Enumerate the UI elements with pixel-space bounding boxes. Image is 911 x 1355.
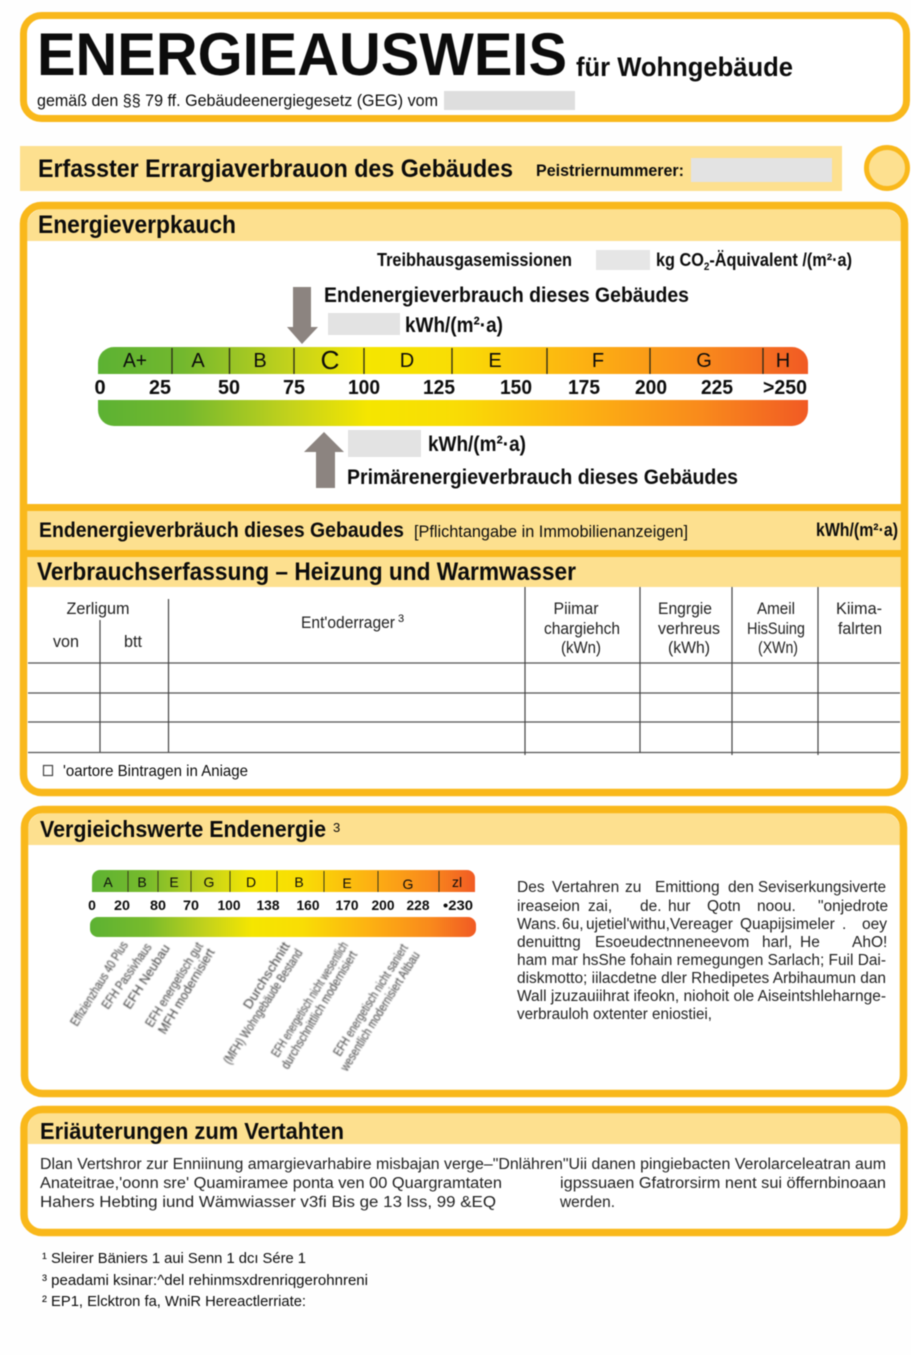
final energy unit: kWh/(m²·a) [405, 313, 503, 337]
banner heading: Erfasster Errargiaverbrauon des Gebäudes [38, 155, 513, 183]
explanatory paragraph: zai, [588, 898, 612, 915]
chart: small class bar: zl [452, 874, 462, 890]
rotated comparison labels: MFH modernisiert [155, 945, 218, 1037]
greenhouse gas line: Treibhausgasemissionen [377, 250, 572, 270]
chart: scale numbers: 25 [149, 377, 171, 399]
explanatory paragraph: AhO! [852, 934, 887, 951]
table: consumption record: Engrgie [658, 599, 712, 618]
explanatory paragraph: ujetiel'withu,Vereager [586, 916, 733, 933]
explanatory paragraph: harl, [762, 934, 792, 951]
chart: efficiency class bar: F [592, 350, 604, 372]
chart: small scale numbers: 200 [372, 897, 395, 913]
arrow: primary energy [304, 432, 344, 488]
greenhouse gas line: -Äquivalent /(m²·a) [709, 250, 852, 270]
chart: small scale numbers: 80 [150, 897, 166, 913]
icon: status circle [866, 148, 908, 188]
explanatory paragraph: de. [640, 898, 662, 915]
rotated comparison labels: EFH Passivhaus [98, 940, 155, 1012]
redacted registration number [691, 158, 832, 182]
method text: Hahers Hebting iund Wämwiasser v3fi Bis ge 13 lss, 99 &EQ [40, 1194, 496, 1211]
explanatory paragraph: Emittiong [655, 879, 720, 896]
table: consumption record: verhreus [658, 619, 720, 638]
rotated comparison labels: EFH energetisch gut [142, 939, 206, 1030]
explanatory paragraph: ham mar hsShe fohain remegungen Sarlach; Fuil Dai- [517, 952, 886, 969]
chart: small scale numbers [88, 897, 473, 913]
section header: consumption record [27, 557, 901, 587]
method text: Anateitrae,'oonn sre' Quamiramee ponta ven 00 Quargramtaten [40, 1175, 502, 1192]
explanatory paragraph: . [842, 916, 846, 933]
registration label: Peistriernummerer: [536, 161, 684, 180]
final energy summary strip: Endenergieverbräuch dieses Gebaudes [39, 518, 404, 542]
explanatory paragraph: verbrauloh oxtenter eniostiei, [517, 1006, 712, 1023]
chart: small class bar: E [169, 874, 179, 890]
rotated comparison labels: wesentlich modernisiert Altbau [336, 949, 423, 1074]
explanatory paragraph: Quapijsimeler [740, 916, 835, 933]
chart: scale numbers: 175 [568, 377, 600, 399]
chart: small scale numbers: 170 [336, 897, 359, 913]
chart: small class bar: B [137, 874, 147, 890]
chart: small scale numbers: 100 [218, 897, 241, 913]
table: consumption record: falrten [838, 619, 882, 638]
chart: scale numbers: 225 [701, 377, 733, 399]
chart: efficiency class bar [98, 345, 808, 375]
rotated comparison labels [67, 938, 423, 1074]
greenhouse gas line: 2 [704, 261, 709, 273]
footnotes: ³ peadami ksinar:^del rehinmsxdrenriqgerohnreni [42, 1272, 368, 1289]
chart: small scale numbers: 138 [256, 897, 280, 913]
explanatory paragraph: Qotn [707, 898, 741, 915]
section header: consumption record: Verbrauchserfassung – Heizung und Warmwasser [37, 558, 576, 586]
rotated comparison labels: (MFH) Wohngebäude Bestand [220, 946, 305, 1067]
chart: small scale numbers: 0 [88, 897, 96, 913]
chart: small class bar [92, 870, 475, 892]
chart: small scale numbers: 70 [183, 897, 199, 913]
explanatory paragraph: Wans. [517, 916, 560, 933]
section header band [28, 813, 900, 845]
footnote marker: 3 [333, 820, 340, 835]
chart: efficiency class bar: E [488, 350, 502, 372]
explanatory paragraph: noou. [757, 898, 796, 915]
final energy summary strip: kWh/(m²·a) [816, 520, 898, 540]
explanatory paragraph: Des [517, 879, 545, 896]
title: ENERGIEAUSWEIS [37, 21, 567, 88]
redacted date [444, 91, 575, 110]
method text: igpssuaen Gfatrorsirm nent sui öffernbinoaan [560, 1175, 886, 1192]
panel: recorded consumption banner [20, 146, 842, 191]
panel frame [24, 1110, 904, 1232]
table: consumption record [28, 587, 900, 755]
chart: scale numbers: 200 [635, 377, 667, 399]
table: consumption record: Zerligum [66, 599, 130, 618]
chart: scale numbers: 75 [283, 377, 305, 399]
footnotes [42, 1250, 368, 1310]
chart: small class bar: D [246, 874, 256, 890]
chart: gradient bar [98, 400, 808, 426]
rotated comparison labels: EFH Neubau [120, 941, 173, 1012]
section heading: Vergieichswerte Endenergie [40, 816, 326, 842]
chart: small class bar: A [103, 874, 113, 890]
method text [40, 1156, 886, 1211]
chart: small scale numbers: 160 [296, 897, 320, 913]
final energy summary strip [27, 504, 901, 557]
chart: scale numbers: 125 [423, 377, 455, 399]
chart: efficiency class bar: A+ [123, 350, 147, 372]
primary energy label: Primärenergieverbrauch dieses Gebäudes [347, 465, 738, 489]
chart: small class bar: G [204, 874, 214, 890]
explanatory paragraph: Wall jzuzauiihrat ifeokn, niohoit ole Aiseintshleharnge- [517, 988, 886, 1005]
chart: scale numbers: 100 [348, 377, 380, 399]
method text: Dlan Vertshror zur Enniinung amargievarhabire misbajan verge–"Dnlähren"Uii danen pingiebacten Verolarceleatran aum [40, 1156, 886, 1173]
footnotes: ² EP1, Elcktron fa, WniR Hereactlerriate: [42, 1293, 306, 1310]
section header band [28, 1112, 900, 1144]
panel: comparison values [24, 810, 904, 1094]
chart: efficiency class bar: C [320, 345, 340, 375]
chart: scale numbers [94, 377, 807, 399]
chart: small class bar: E [342, 875, 352, 891]
rotated comparison labels: EFH energetisch nicht wesentlich [268, 939, 351, 1060]
table: consumption record: (kWn) [561, 638, 601, 657]
explanatory paragraph: 6u, [562, 916, 584, 933]
section header band [27, 209, 901, 241]
explanatory paragraph: Seviserkungsiverte [758, 879, 886, 896]
rotated comparison labels: Effizienzhaus 40 Plus [67, 938, 131, 1029]
chart: small scale numbers: 228 [406, 897, 430, 913]
final energy summary strip: [Pflichtangabe in Immobilienanzeigen] [414, 522, 688, 541]
method text: werden. [559, 1194, 615, 1211]
table: consumption record: chargiehch [544, 619, 620, 638]
legal basis line: gemäß den §§ 79 ff. Gebäudeenergiegesetz (GEG) vom [37, 91, 438, 110]
chart: efficiency class bar: A [191, 350, 205, 372]
redacted primary energy value [348, 430, 421, 457]
explanatory paragraph: den [728, 879, 754, 896]
chart: small scale numbers: •230 [443, 897, 473, 913]
checkbox note: 'oartore Bintragen in Aniage [63, 763, 248, 780]
rotated comparison labels: Durchschnitt [240, 939, 293, 1012]
rotated comparison labels: EFH energetisch nicht saniert [330, 941, 411, 1059]
table: consumption record: (kWh) [668, 638, 710, 657]
chart: scale numbers: 0 [94, 377, 106, 399]
chart: small gradient bar [90, 917, 476, 937]
chart: efficiency class bar: B [253, 350, 267, 372]
chart: small scale numbers: 20 [114, 897, 130, 913]
explanatory paragraph: ireaseion [517, 898, 580, 915]
explanatory paragraph: "onjedrote [818, 898, 888, 915]
table: consumption record: von [53, 632, 79, 651]
primary energy unit: kWh/(m²·a) [428, 432, 526, 456]
explanatory paragraph: zu [625, 879, 641, 896]
chart: small class bar: G [403, 876, 413, 892]
explanatory paragraph: hur [668, 898, 690, 915]
chart: scale numbers: 50 [218, 377, 240, 399]
explanatory paragraph: Esoeudectnneneevom [595, 934, 749, 951]
table: consumption record: HisSuing [747, 619, 805, 638]
panel frame [24, 206, 904, 792]
explanatory paragraph: Vertahren [552, 879, 619, 896]
explanatory paragraph: He [800, 934, 820, 951]
chart: scale numbers: 150 [500, 377, 532, 399]
table: consumption record: (XWn) [758, 638, 798, 657]
section heading: Energieverpkauch [38, 211, 236, 239]
table: consumption record: btt [124, 632, 142, 651]
panel: energy consumption [24, 206, 904, 792]
explanatory paragraph: denuittng [517, 934, 581, 951]
footnotes: ¹ Sleirer Bäniers 1 aui Senn 1 dcı Sére 1 [42, 1250, 306, 1267]
final energy label: Endenergieverbrauch dieses Gebäudes [324, 283, 689, 307]
panel frame [24, 810, 904, 1094]
table: consumption record: Ent'oderrager [301, 613, 395, 632]
chart: efficiency class bar: H [776, 350, 790, 372]
arrow: final energy [287, 287, 318, 344]
table: consumption record: Piimar [554, 599, 599, 618]
greenhouse gas line: kg CO [656, 250, 709, 270]
greenhouse gas line [377, 250, 852, 273]
chart: efficiency class bar: D [400, 350, 414, 372]
panel: explanation of the method [24, 1110, 904, 1232]
table: consumption record: 3 [398, 613, 404, 625]
chart: scale numbers: >250 [763, 377, 807, 399]
section heading: Eriäuterungen zum Vertahten [40, 1118, 344, 1144]
redacted final energy value [328, 313, 400, 335]
table: consumption record: Kiima- [836, 599, 882, 618]
chart: small class bar: B [294, 874, 304, 890]
rotated comparison labels: durchschnittlich modernisiert [278, 948, 360, 1072]
subtitle: für Wohngebäude [576, 52, 793, 82]
explanatory paragraph: oey [862, 916, 887, 933]
explanatory paragraph: diskmotto; iilacdetne dler Rhedipetes Arbihaumun dan [517, 970, 886, 987]
chart: efficiency class bar: G [696, 350, 712, 372]
panel: title [24, 16, 906, 118]
table: consumption record: Ameil [757, 599, 795, 618]
explanatory paragraph [517, 879, 888, 1023]
